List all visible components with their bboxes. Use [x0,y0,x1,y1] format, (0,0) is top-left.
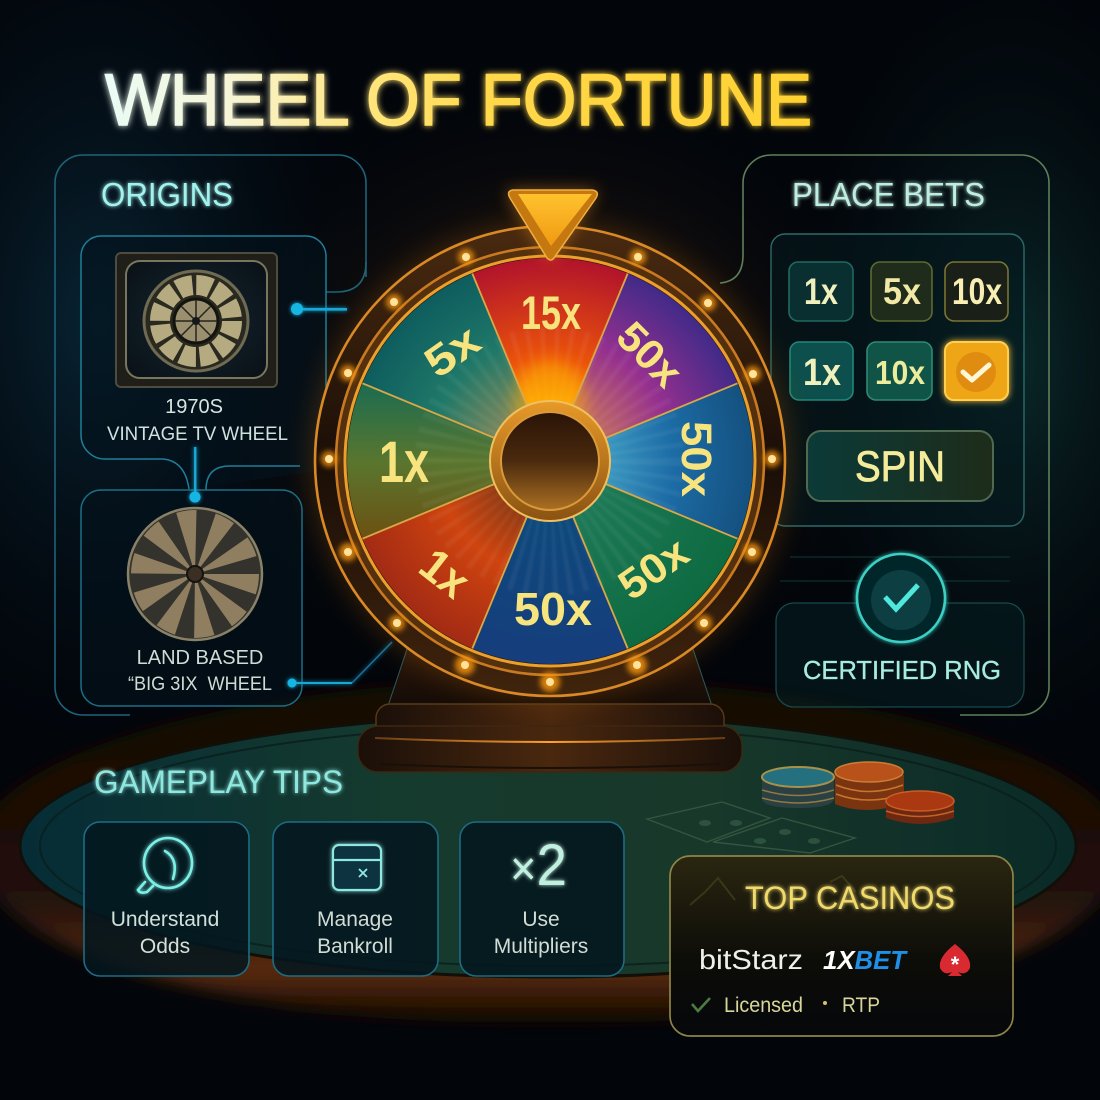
bet button 10x [945,262,1008,321]
logo: red spade: * [951,952,960,977]
bet button 10x second row: 10x [875,354,926,391]
label 50x green: 50x [609,528,698,609]
card: use multipliers [460,822,624,976]
bullet [823,1001,827,1005]
spin button [807,431,993,501]
segment teal 5x [362,274,550,461]
card text: Use [522,908,560,931]
bet button 10x: 10x [952,271,1002,312]
card text: Multipliers [494,935,588,958]
logo: bitstarz: bitStarz [699,944,803,975]
label 5x: 5x [416,316,489,388]
segment red 1x [362,461,550,648]
wheel pointer [508,190,597,262]
segment dividers [362,274,738,648]
caption: big six wheel: “BIG 3IX WHEEL [128,673,272,695]
connector: land wheel [288,642,392,688]
place bets heading: PLACE BETS [792,176,985,213]
wheel labels [379,286,720,635]
spin button: SPIN [855,443,945,491]
segment light rays [455,359,645,556]
rtp label: RTP [842,994,880,1017]
card text: Manage [317,908,393,931]
label 15x: 15x [521,286,581,339]
bet button 1x second row: 1x [803,352,841,394]
panel: origins [55,155,366,715]
table card outlines [647,802,855,853]
segment purple 50x [550,274,738,461]
icon: magnifier [138,838,192,893]
top casinos heading: TOP CASINOS [745,880,955,916]
icon: wallet [333,845,381,890]
wheel segments [347,258,753,664]
segment 15x [472,258,628,461]
rim lights [321,249,780,692]
title: WHEEL OF FORTUNE [105,60,812,141]
casino table [0,680,1100,1024]
faint mountain decoration [690,876,856,905]
connector: tv wheel to land wheel [190,447,200,502]
segment bottom blue 50x [472,461,628,664]
connector: tv wheel to wheel [291,303,347,315]
gameplay tips heading: GAMEPLAY TIPS [94,764,343,800]
panel: top casinos [670,856,1013,1036]
wheel glow [312,223,788,699]
chip stack: teal [762,767,834,808]
certified rng box [776,554,1024,707]
label 50x bottom: 50x [514,583,592,635]
certified rng label: CERTIFIED RNG [803,655,1001,685]
wheel hub [490,401,610,521]
icon: vintage tv [116,253,277,387]
label 1x olive: 1x [379,430,429,495]
selected bet check [945,342,1008,400]
card text: Odds [140,935,190,958]
panel: place bets [720,155,1049,715]
licensed label: Licensed [724,994,803,1017]
card: land based wheel [81,490,302,706]
casino chips [762,762,954,824]
bet button 5x [871,262,932,321]
bet button 1x second row [790,342,853,400]
card: understand odds [84,822,249,976]
bet board [771,234,1024,526]
card text: Understand [111,908,219,931]
icon: certified check [857,554,945,642]
chip stack: red [886,791,954,824]
icon: big six wheel [128,508,262,640]
wheel rim [315,226,785,696]
icon: times two: ×2 [510,833,567,898]
chip stack: orange [835,762,904,810]
bet button 5x: 5x [883,271,921,312]
caption: land based: LAND BASED [137,647,263,669]
segment olive 1x [347,383,550,539]
logo: 1xbet: 1XBET [823,945,908,975]
label 1x red: 1x [410,538,480,609]
wheel pedestal [358,640,742,772]
card text: Bankroll [317,935,393,958]
origins heading: ORIGINS [101,176,233,213]
label 50x purple: 50x [608,312,692,397]
card: vintage tv wheel [81,236,326,490]
logo: red spade [940,944,970,977]
caption: vintage tv wheel: VINTAGE TV WHEEL [107,423,288,445]
segment blue 50x [550,383,753,539]
wheel of fortune [312,190,788,699]
card: manage bankroll [273,822,438,976]
segment green 50x [550,461,738,648]
licensed checkmark [692,998,710,1011]
bet button 1x: 1x [804,271,838,312]
caption: 1970s: 1970S [165,396,223,418]
label 50x blue: 50x [672,421,720,497]
bet button 1x [789,262,853,321]
bet button 10x second row [867,342,932,400]
